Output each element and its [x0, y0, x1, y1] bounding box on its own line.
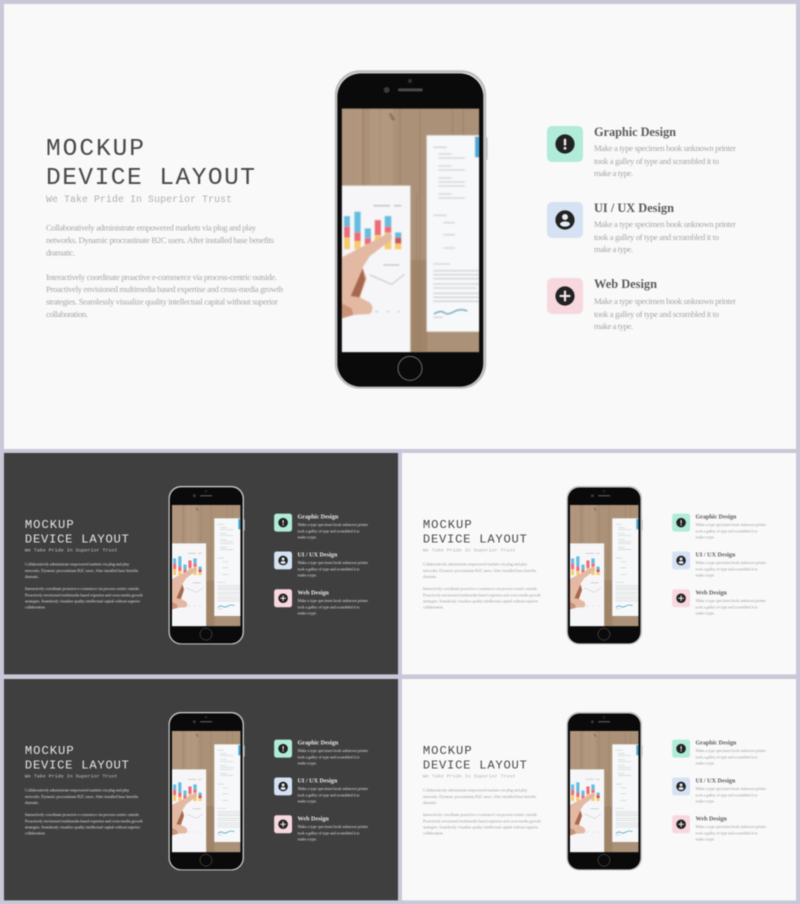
- feature: UI / UX Design: UI / UX Design: [696, 552, 736, 558]
- phone mockup: [336, 72, 488, 388]
- text block: intro: networks. Dynamic procrastinate B2C users. After installed base benefits: [25, 568, 139, 573]
- text block: intro: Interactively coordinate proactive e-commerce via process-centric outside.: [25, 586, 140, 591]
- feature: UI / UX Design: UI / UX Design: [696, 778, 736, 784]
- text block: intro: Collaboratively administrate empowered markets via plug and play: [46, 222, 257, 232]
- feature: Web Design: took a galley of type and scrambled it to: [696, 605, 758, 610]
- feature: Web Design: make a type.: [594, 321, 633, 331]
- feature: Graphic Design: [274, 740, 369, 766]
- feature: UI / UX Design: [672, 551, 767, 577]
- feature: Web Design: Make a type specimen book unknown printer: [298, 598, 369, 603]
- feature: Graphic Design: [672, 740, 767, 766]
- feature: UI / UX Design: took a galley of type and scrambled it to: [298, 566, 360, 571]
- subtitle: We Take Pride In Superior Trust: [25, 547, 117, 553]
- feature: UI / UX Design: took a galley of type and scrambled it to: [298, 792, 360, 797]
- phone mockup: [567, 487, 643, 644]
- feature: Graphic Design: Make a type specimen book unknown printer: [298, 748, 369, 753]
- feature: UI / UX Design: [274, 777, 369, 803]
- text block: intro: collaboration.: [25, 605, 46, 610]
- feature: Web Design: Make a type specimen book unknown printer: [594, 296, 736, 306]
- title: DEVICE LAYOUT: [25, 533, 129, 547]
- feature: UI / UX Design: Make a type specimen book unknown printer: [298, 786, 369, 791]
- feature: Graphic Design: took a galley of type and scrambled it to: [696, 755, 758, 760]
- phone mockup: [169, 487, 245, 644]
- text block: intro: networks. Dynamic procrastinate B2C users. After installed base benefits: [25, 794, 139, 799]
- feature: Web Design: took a galley of type and scrambled it to: [298, 831, 360, 836]
- feature: Graphic Design: make a type.: [696, 761, 715, 766]
- title: [25, 518, 129, 547]
- feature: UI / UX Design: took a galley of type and scrambled it to: [594, 232, 719, 242]
- feature: UI / UX Design: UI / UX Design: [298, 778, 338, 784]
- feature: Web Design: [274, 589, 369, 616]
- phone mockup: [169, 713, 245, 870]
- text block: intro: Interactively coordinate proactive e-commerce via process-centric outside.: [25, 812, 140, 817]
- title: DEVICE LAYOUT: [25, 759, 129, 773]
- feature: Web Design: Web Design: [298, 816, 329, 822]
- text block: intro: collaboration.: [25, 831, 46, 836]
- title: DEVICE LAYOUT: [46, 165, 255, 192]
- text block: intro: Interactively coordinate proactive e-commerce via process-centric outside.: [423, 586, 538, 591]
- feature: UI / UX Design: make a type.: [594, 244, 633, 254]
- text block: intro: collaboration.: [423, 831, 444, 836]
- text block: intro: strategies. Seamlessly visualize quality intellectual capital without superior: [423, 598, 539, 603]
- text block: intro: [423, 562, 542, 610]
- text block: intro: strategies. Seamlessly visualize quality intellectual capital without superior: [25, 824, 141, 829]
- text block: intro: dramatic.: [25, 574, 39, 579]
- text block: intro: Collaboratively administrate empowered markets via plug and play: [423, 562, 528, 567]
- text block: intro: dramatic.: [423, 800, 437, 805]
- title: MOCKUP: [25, 744, 74, 758]
- panel: large light slide: [4, 4, 796, 449]
- feature: Graphic Design: took a galley of type and scrambled it to: [696, 529, 758, 534]
- feature: Graphic Design: Make a type specimen book unknown printer: [594, 143, 736, 153]
- feature: Web Design: [672, 589, 767, 616]
- feature: Graphic Design: Make a type specimen book unknown printer: [696, 748, 767, 753]
- feature: Graphic Design: [547, 125, 736, 178]
- panel: small dark slide bottom: [4, 679, 398, 900]
- feature: Web Design: took a galley of type and scrambled it to: [298, 605, 360, 610]
- feature: Graphic Design: took a galley of type and scrambled it to: [298, 529, 360, 534]
- text block: intro: dramatic.: [423, 574, 437, 579]
- panel: small light slide top: [402, 453, 796, 674]
- feature: Web Design: make a type.: [696, 611, 715, 616]
- feature: UI / UX Design: make a type.: [298, 798, 317, 803]
- title: MOCKUP: [25, 518, 74, 532]
- feature: Web Design: [547, 277, 736, 331]
- subtitle: We Take Pride In Superior Trust: [25, 773, 117, 779]
- title: [423, 518, 527, 547]
- feature: Graphic Design: Graphic Design: [696, 515, 737, 521]
- text block: intro: [423, 788, 542, 836]
- subtitle: We Take Pride In Superior Trust: [46, 194, 232, 205]
- text block: intro: strategies. Seamlessly visualize quality intellectual capital without superior: [423, 824, 539, 829]
- feature: Web Design: Web Design: [696, 816, 727, 822]
- title: DEVICE LAYOUT: [423, 759, 527, 773]
- text block: intro: collaboration.: [423, 605, 444, 610]
- feature: Graphic Design: took a galley of type and scrambled it to: [594, 156, 719, 166]
- text block: intro: [25, 788, 144, 836]
- feature: UI / UX Design: UI / UX Design: [298, 552, 338, 558]
- title: MOCKUP: [423, 744, 472, 758]
- subtitle: We Take Pride In Superior Trust: [423, 773, 515, 779]
- feature: Graphic Design: Make a type specimen book unknown printer: [696, 522, 767, 527]
- feature: Graphic Design: Make a type specimen book unknown printer: [298, 522, 369, 527]
- feature: UI / UX Design: [274, 551, 369, 577]
- text block: intro: Proactively envisioned multimedia based expertise and cross-media growth: [423, 818, 542, 823]
- feature: Web Design: Web Design: [696, 590, 727, 596]
- feature: UI / UX Design: took a galley of type and scrambled it to: [696, 792, 758, 797]
- text block: intro: Interactively coordinate proactive e-commerce via process-centric outside.: [46, 272, 277, 282]
- text block: intro: Proactively envisioned multimedia based expertise and cross-media growth: [46, 284, 284, 294]
- title: MOCKUP: [46, 136, 144, 163]
- feature: Graphic Design: [274, 514, 369, 540]
- text block: intro: Collaboratively administrate empowered markets via plug and play: [423, 788, 528, 793]
- text block: intro: networks. Dynamic procrastinate B2C users. After installed base benefits: [46, 235, 275, 245]
- title: MOCKUP: [423, 518, 472, 532]
- feature: Web Design: [274, 815, 369, 842]
- text block: intro: Collaboratively administrate empowered markets via plug and play: [25, 562, 130, 567]
- feature: Web Design: Make a type specimen book unknown printer: [298, 824, 369, 829]
- text block: intro: [25, 562, 144, 610]
- feature: UI / UX Design: make a type.: [696, 572, 715, 577]
- text block: intro: strategies. Seamlessly visualize quality intellectual capital without superior: [25, 598, 141, 603]
- title: [25, 744, 129, 773]
- text block: intro: Interactively coordinate proactive e-commerce via process-centric outside.: [423, 812, 538, 817]
- feature: Graphic Design: Graphic Design: [696, 741, 737, 747]
- feature: Graphic Design: make a type.: [298, 761, 317, 766]
- text block: intro: [46, 222, 284, 319]
- feature: Graphic Design: Graphic Design: [594, 125, 676, 139]
- feature: UI / UX Design: make a type.: [298, 572, 317, 577]
- feature: Web Design: make a type.: [696, 837, 715, 842]
- feature: UI / UX Design: took a galley of type and scrambled it to: [696, 566, 758, 571]
- title: DEVICE LAYOUT: [423, 533, 527, 547]
- feature: Web Design: Make a type specimen book unknown printer: [696, 598, 767, 603]
- text block: intro: dramatic.: [46, 247, 75, 257]
- title: [46, 136, 255, 192]
- feature: Graphic Design: Graphic Design: [298, 741, 339, 747]
- feature: Web Design: make a type.: [298, 611, 317, 616]
- panel: small dark slide top: [4, 453, 398, 674]
- feature: UI / UX Design: Make a type specimen book unknown printer: [594, 219, 736, 229]
- feature: UI / UX Design: UI / UX Design: [594, 201, 674, 215]
- text block: intro: Proactively envisioned multimedia based expertise and cross-media growth: [423, 592, 542, 597]
- feature: Graphic Design: took a galley of type and scrambled it to: [298, 755, 360, 760]
- feature: Graphic Design: make a type.: [696, 535, 715, 540]
- feature: Graphic Design: make a type.: [594, 168, 633, 178]
- feature: Web Design: Web Design: [298, 590, 329, 596]
- text block: intro: networks. Dynamic procrastinate B2C users. After installed base benefits: [423, 794, 537, 799]
- title: [423, 744, 527, 773]
- text block: intro: collaboration.: [46, 309, 88, 319]
- feature: UI / UX Design: Make a type specimen book unknown printer: [298, 560, 369, 565]
- feature: UI / UX Design: make a type.: [696, 798, 715, 803]
- feature: UI / UX Design: [672, 777, 767, 803]
- phone mockup: [567, 713, 643, 870]
- feature: Graphic Design: make a type.: [298, 535, 317, 540]
- text block: intro: dramatic.: [25, 800, 39, 805]
- feature: Graphic Design: [672, 514, 767, 540]
- text block: intro: networks. Dynamic procrastinate B2C users. After installed base benefits: [423, 568, 537, 573]
- text block: intro: strategies. Seamlessly visualize quality intellectual capital without superior: [46, 296, 278, 306]
- feature: UI / UX Design: Make a type specimen book unknown printer: [696, 786, 767, 791]
- panel: small light slide bottom: [402, 679, 796, 900]
- feature: UI / UX Design: [547, 201, 736, 254]
- feature: Web Design: [672, 815, 767, 842]
- feature: Web Design: Web Design: [594, 277, 657, 291]
- text block: intro: Collaboratively administrate empowered markets via plug and play: [25, 788, 130, 793]
- feature: Web Design: took a galley of type and scrambled it to: [696, 831, 758, 836]
- feature: Web Design: Make a type specimen book unknown printer: [696, 824, 767, 829]
- feature: UI / UX Design: Make a type specimen book unknown printer: [696, 560, 767, 565]
- feature: Graphic Design: Graphic Design: [298, 515, 339, 521]
- text block: intro: Proactively envisioned multimedia based expertise and cross-media growth: [25, 592, 144, 597]
- feature: Web Design: took a galley of type and scrambled it to: [594, 309, 719, 319]
- text block: intro: Proactively envisioned multimedia based expertise and cross-media growth: [25, 818, 144, 823]
- feature: Web Design: make a type.: [298, 837, 317, 842]
- subtitle: We Take Pride In Superior Trust: [423, 547, 515, 553]
